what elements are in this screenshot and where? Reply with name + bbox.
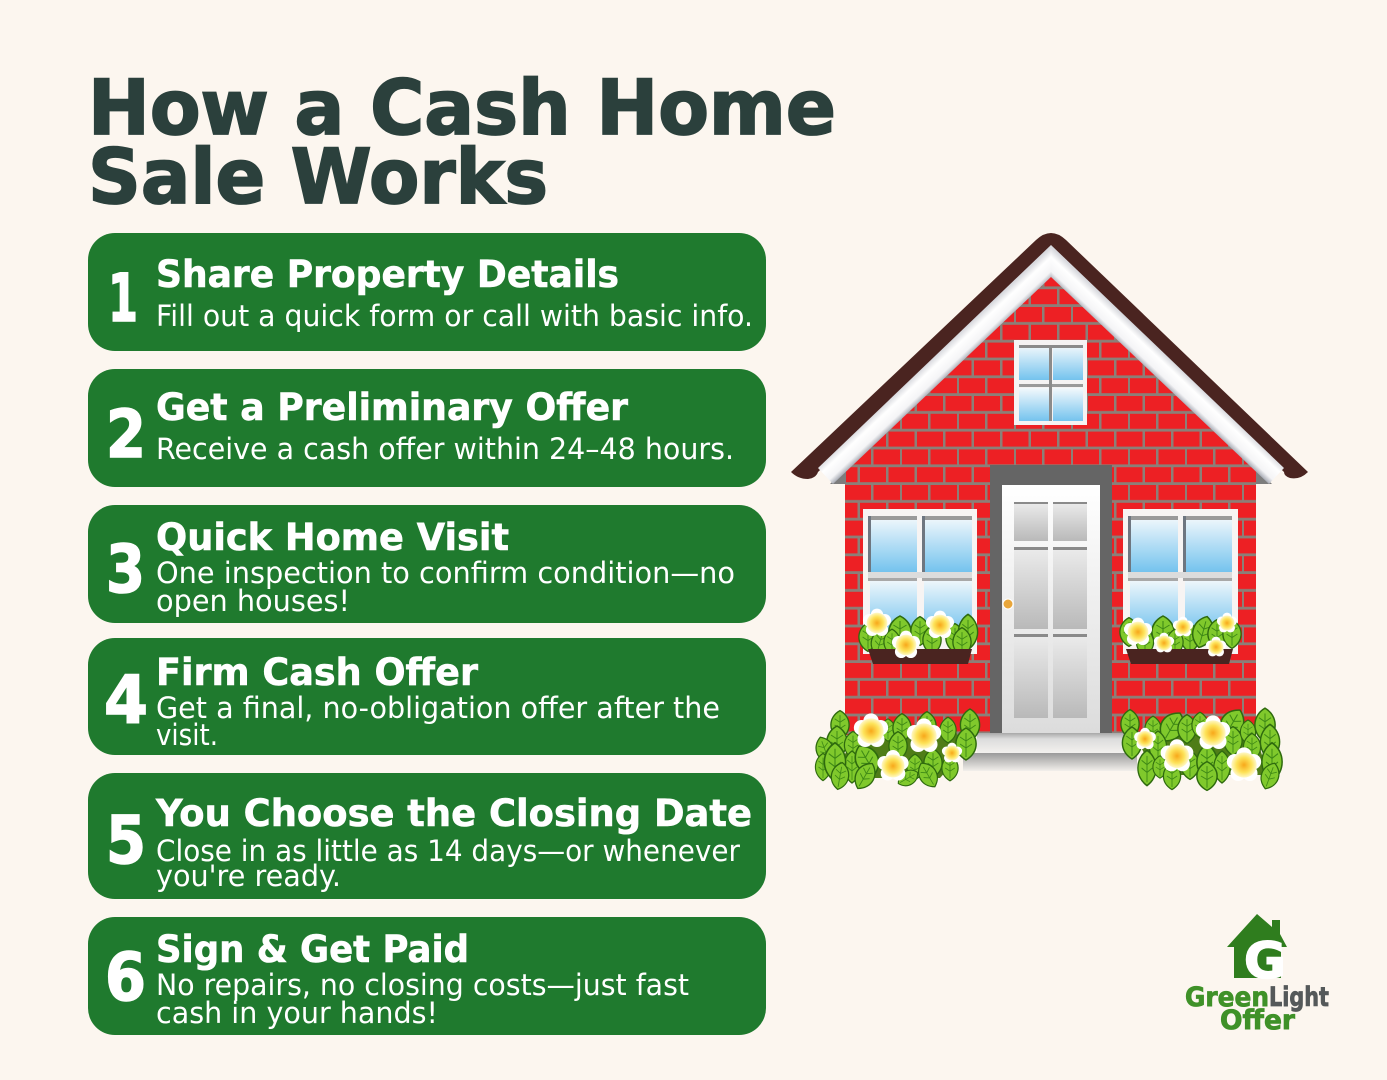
panel: step 6: Sign & Get Paid (156, 928, 469, 971)
title: Sale Works (88, 132, 548, 221)
panel: step 5: Close in as little as 14 days—or whenever (156, 834, 740, 868)
panel: step 4 (88, 638, 766, 755)
panel: step 3: 3 (106, 531, 145, 608)
illustration: red brick house (791, 233, 1308, 793)
panel: step 1 (88, 233, 766, 351)
door (990, 465, 1112, 733)
logo wordmark (1185, 982, 1329, 1036)
panel: step 6 (88, 917, 766, 1035)
logo: GreenLight Offer (1185, 914, 1329, 1036)
logo wordmark: Light (1269, 982, 1329, 1013)
panel: step 4: Get a final, no-obligation offer after the (156, 691, 720, 725)
right flower box (1120, 613, 1241, 664)
panel: step 3: One inspection to confirm condition—no (156, 556, 735, 590)
panel: step 6: 6 (105, 939, 146, 1016)
brick walls (845, 268, 1256, 735)
title: How a Cash Home (88, 63, 836, 152)
panel: step 5 (88, 773, 766, 899)
left bush (812, 709, 980, 793)
roof (791, 233, 1308, 484)
panel: step 2: Get a Preliminary Offer (156, 386, 629, 429)
right bush (1121, 705, 1283, 792)
logo wordmark: Offer (1220, 1005, 1296, 1036)
panel: step 1: Share Property Details (156, 253, 619, 296)
panel: step 4: Firm Cash Offer (156, 651, 479, 694)
panel: step 5: You Choose the Closing Date (155, 792, 752, 835)
logo wordmark: Green (1185, 982, 1269, 1013)
panel: step 5: 5 (106, 802, 146, 879)
steps (963, 733, 1137, 771)
icon: logo house: G (1244, 932, 1286, 990)
panel: step 2: Receive a cash offer within 24–48 hours. (156, 432, 734, 466)
left flower box (859, 609, 978, 664)
panel: step 2: 2 (106, 396, 146, 473)
attic window (1014, 340, 1087, 425)
panel: step 4: visit. (156, 718, 218, 752)
left window (863, 509, 977, 654)
title (88, 63, 836, 221)
panel: step 1: Fill out a quick form or call with basic info. (156, 299, 753, 333)
panel: step 6: cash in your hands! (156, 996, 438, 1030)
panel: step 4: 4 (104, 662, 148, 739)
panel: step 1: 1 (108, 260, 138, 337)
panel: step 2 (88, 369, 766, 487)
panel: step 5: you're ready. (156, 859, 341, 893)
right window (1123, 509, 1238, 654)
icon: logo house (1227, 914, 1287, 990)
panel: step 3: open houses! (156, 584, 350, 618)
panel: step 6: No repairs, no closing costs—just fast (156, 968, 689, 1002)
panel: step 3 (88, 505, 766, 623)
panel: step 3: Quick Home Visit (156, 516, 509, 559)
